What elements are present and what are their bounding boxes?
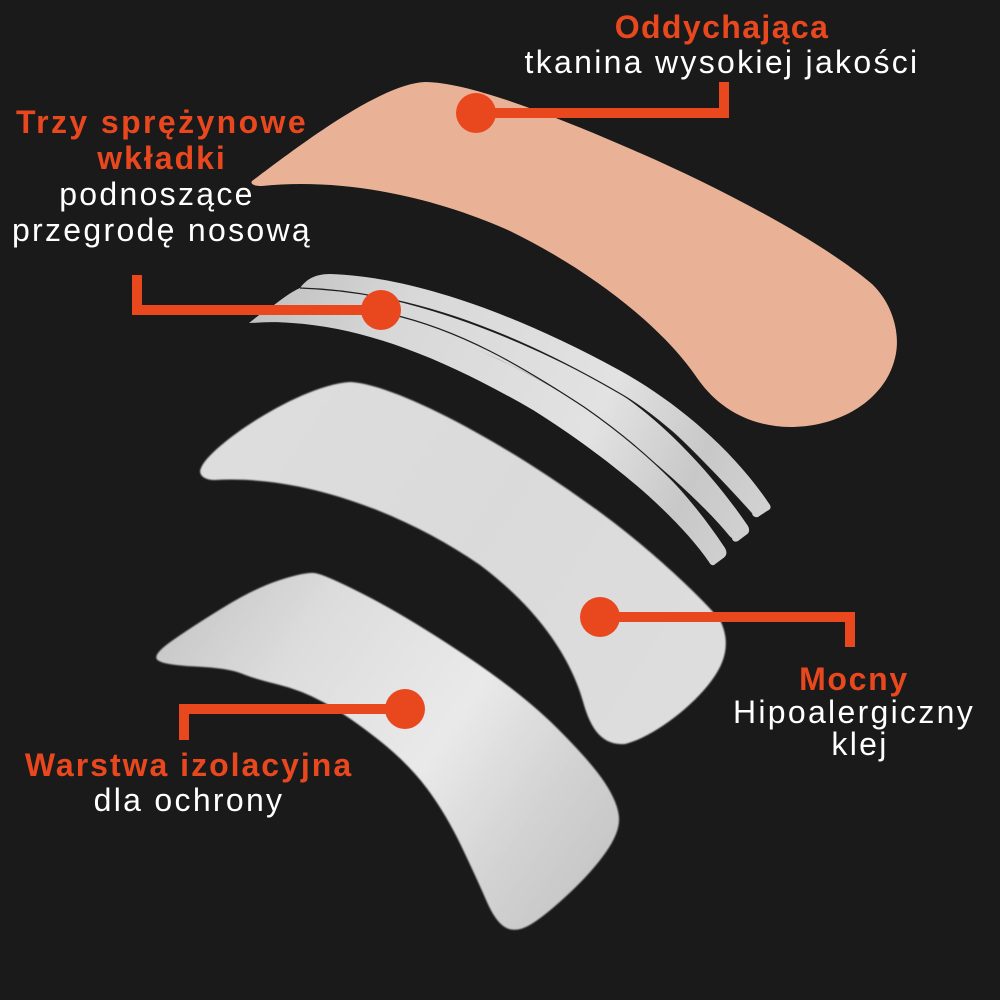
text: breathable fabric: [524, 9, 919, 80]
text: three spring inserts: wkładki: [97, 140, 227, 176]
text: breathable fabric: tkanina wysokiej jakości: [525, 44, 919, 80]
text: three spring inserts: Trzy sprężynowe: [16, 104, 308, 140]
text: three spring inserts: [12, 104, 312, 248]
text: three spring inserts: przegrodę nosową: [12, 212, 312, 248]
layer: breathable fabric: [251, 82, 897, 427]
text: strong adhesive: [733, 661, 975, 762]
layer: three spring inserts: [249, 274, 771, 565]
text: insulating layer: Warstwa izolacyjna: [25, 747, 353, 783]
layer: insulating protection: [156, 573, 619, 930]
text: strong adhesive: klej: [831, 726, 889, 762]
text: strong adhesive: Hipoalergiczny: [733, 694, 975, 730]
text: insulating layer: [24, 747, 353, 818]
text: breathable fabric: Oddychająca: [615, 9, 829, 45]
text: strong adhesive: Mocny: [799, 661, 909, 697]
text: three spring inserts: podnoszące: [59, 176, 255, 212]
layer: strong hypoallergenic adhesive: [200, 382, 726, 744]
text: insulating layer: dla ochrony: [94, 782, 284, 818]
